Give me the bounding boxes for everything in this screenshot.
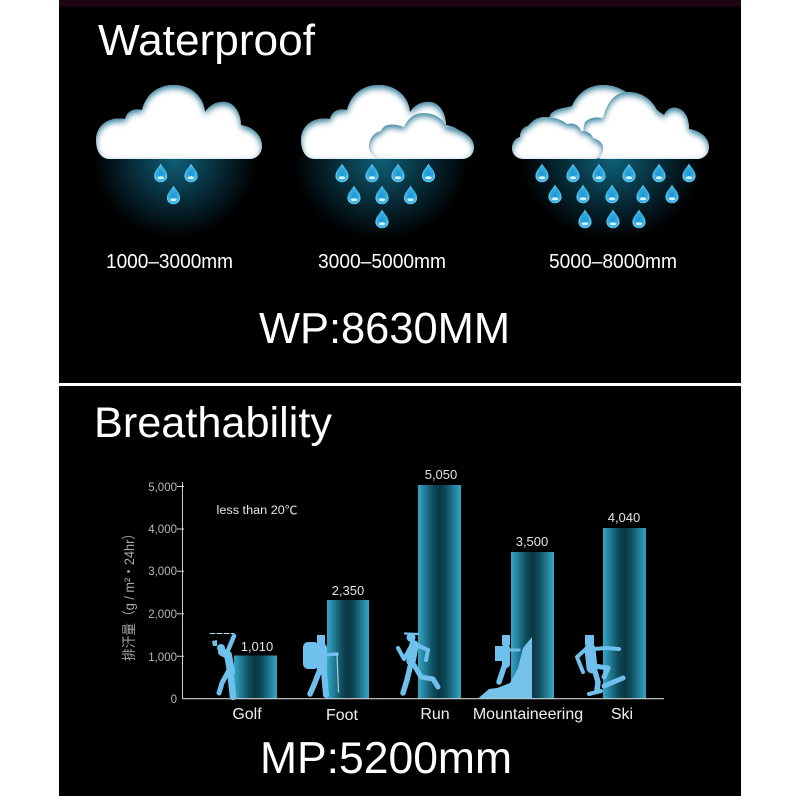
bar value labels: 2,350 — [332, 583, 364, 598]
label: 3000–5000mm: 3000–5000mm — [318, 251, 446, 273]
icon: runner — [398, 633, 438, 693]
rain level: heavy — [512, 80, 709, 273]
bar value labels: 4,040 — [608, 510, 640, 525]
rain level: light — [93, 82, 262, 273]
panel: breathability — [59, 386, 741, 796]
icon: back cloud — [549, 85, 640, 140]
x axis category labels: Mountaineering — [473, 706, 583, 723]
x axis category labels: Foot — [326, 707, 359, 724]
note: less than 20℃: less than 20℃ — [216, 505, 298, 517]
bar value labels: 5,050 — [425, 467, 457, 482]
y axis tick labels: 0 — [171, 694, 177, 706]
x axis baseline — [182, 698, 664, 700]
rain level: medium — [293, 80, 474, 273]
bar chart: sweat output by activity — [121, 467, 664, 724]
icon: hiker — [303, 635, 338, 695]
icon: golfer — [210, 634, 234, 697]
icon: front cloud — [369, 113, 474, 159]
value: WP 8630MM: WP:8630MM — [259, 305, 510, 353]
bar value labels — [241, 467, 640, 654]
icon: eight rain drops — [335, 164, 435, 228]
bar value labels: 1,010 — [241, 639, 273, 654]
icon: skier — [577, 635, 623, 694]
y axis tick labels: 3,000 — [148, 566, 177, 578]
label: 1000–3000mm: 1000–3000mm — [106, 251, 233, 273]
icon: small front cloud — [512, 117, 603, 159]
icon: single cloud — [96, 85, 262, 159]
icon: back cloud — [301, 85, 467, 159]
label: 5000–8000mm: 5000–8000mm — [549, 251, 677, 273]
panel: waterproof — [59, 0, 741, 383]
glow under cloud — [526, 158, 698, 234]
icon: climber on rock — [478, 635, 532, 698]
y axis tick labels — [148, 482, 177, 706]
value: MP 5200mm: MP:5200mm — [260, 734, 512, 783]
x axis category labels — [232, 706, 633, 724]
x axis category labels: Run — [420, 706, 450, 723]
y axis title: 排汗量（g / m²・24hr） — [121, 527, 137, 661]
icon: large cloud — [583, 92, 709, 159]
icon: fourteen rain drops — [535, 164, 696, 228]
bars — [234, 485, 646, 698]
heading: Breathability: Breathability — [94, 399, 332, 447]
bar value labels: 3,500 — [516, 534, 548, 549]
icon: three rain drops — [154, 164, 198, 204]
y axis tick labels: 4,000 — [148, 524, 177, 536]
x axis category labels: Golf — [232, 706, 262, 723]
y axis with ticks — [177, 482, 184, 699]
y axis tick labels: 5,000 — [148, 482, 177, 494]
y axis tick labels: 1,000 — [148, 652, 177, 664]
y axis tick labels: 2,000 — [148, 609, 177, 621]
heading: Waterproof: Waterproof — [98, 16, 316, 65]
glow under cloud — [299, 155, 463, 234]
x axis category labels: Ski — [611, 706, 633, 723]
glow under cloud — [98, 155, 252, 232]
